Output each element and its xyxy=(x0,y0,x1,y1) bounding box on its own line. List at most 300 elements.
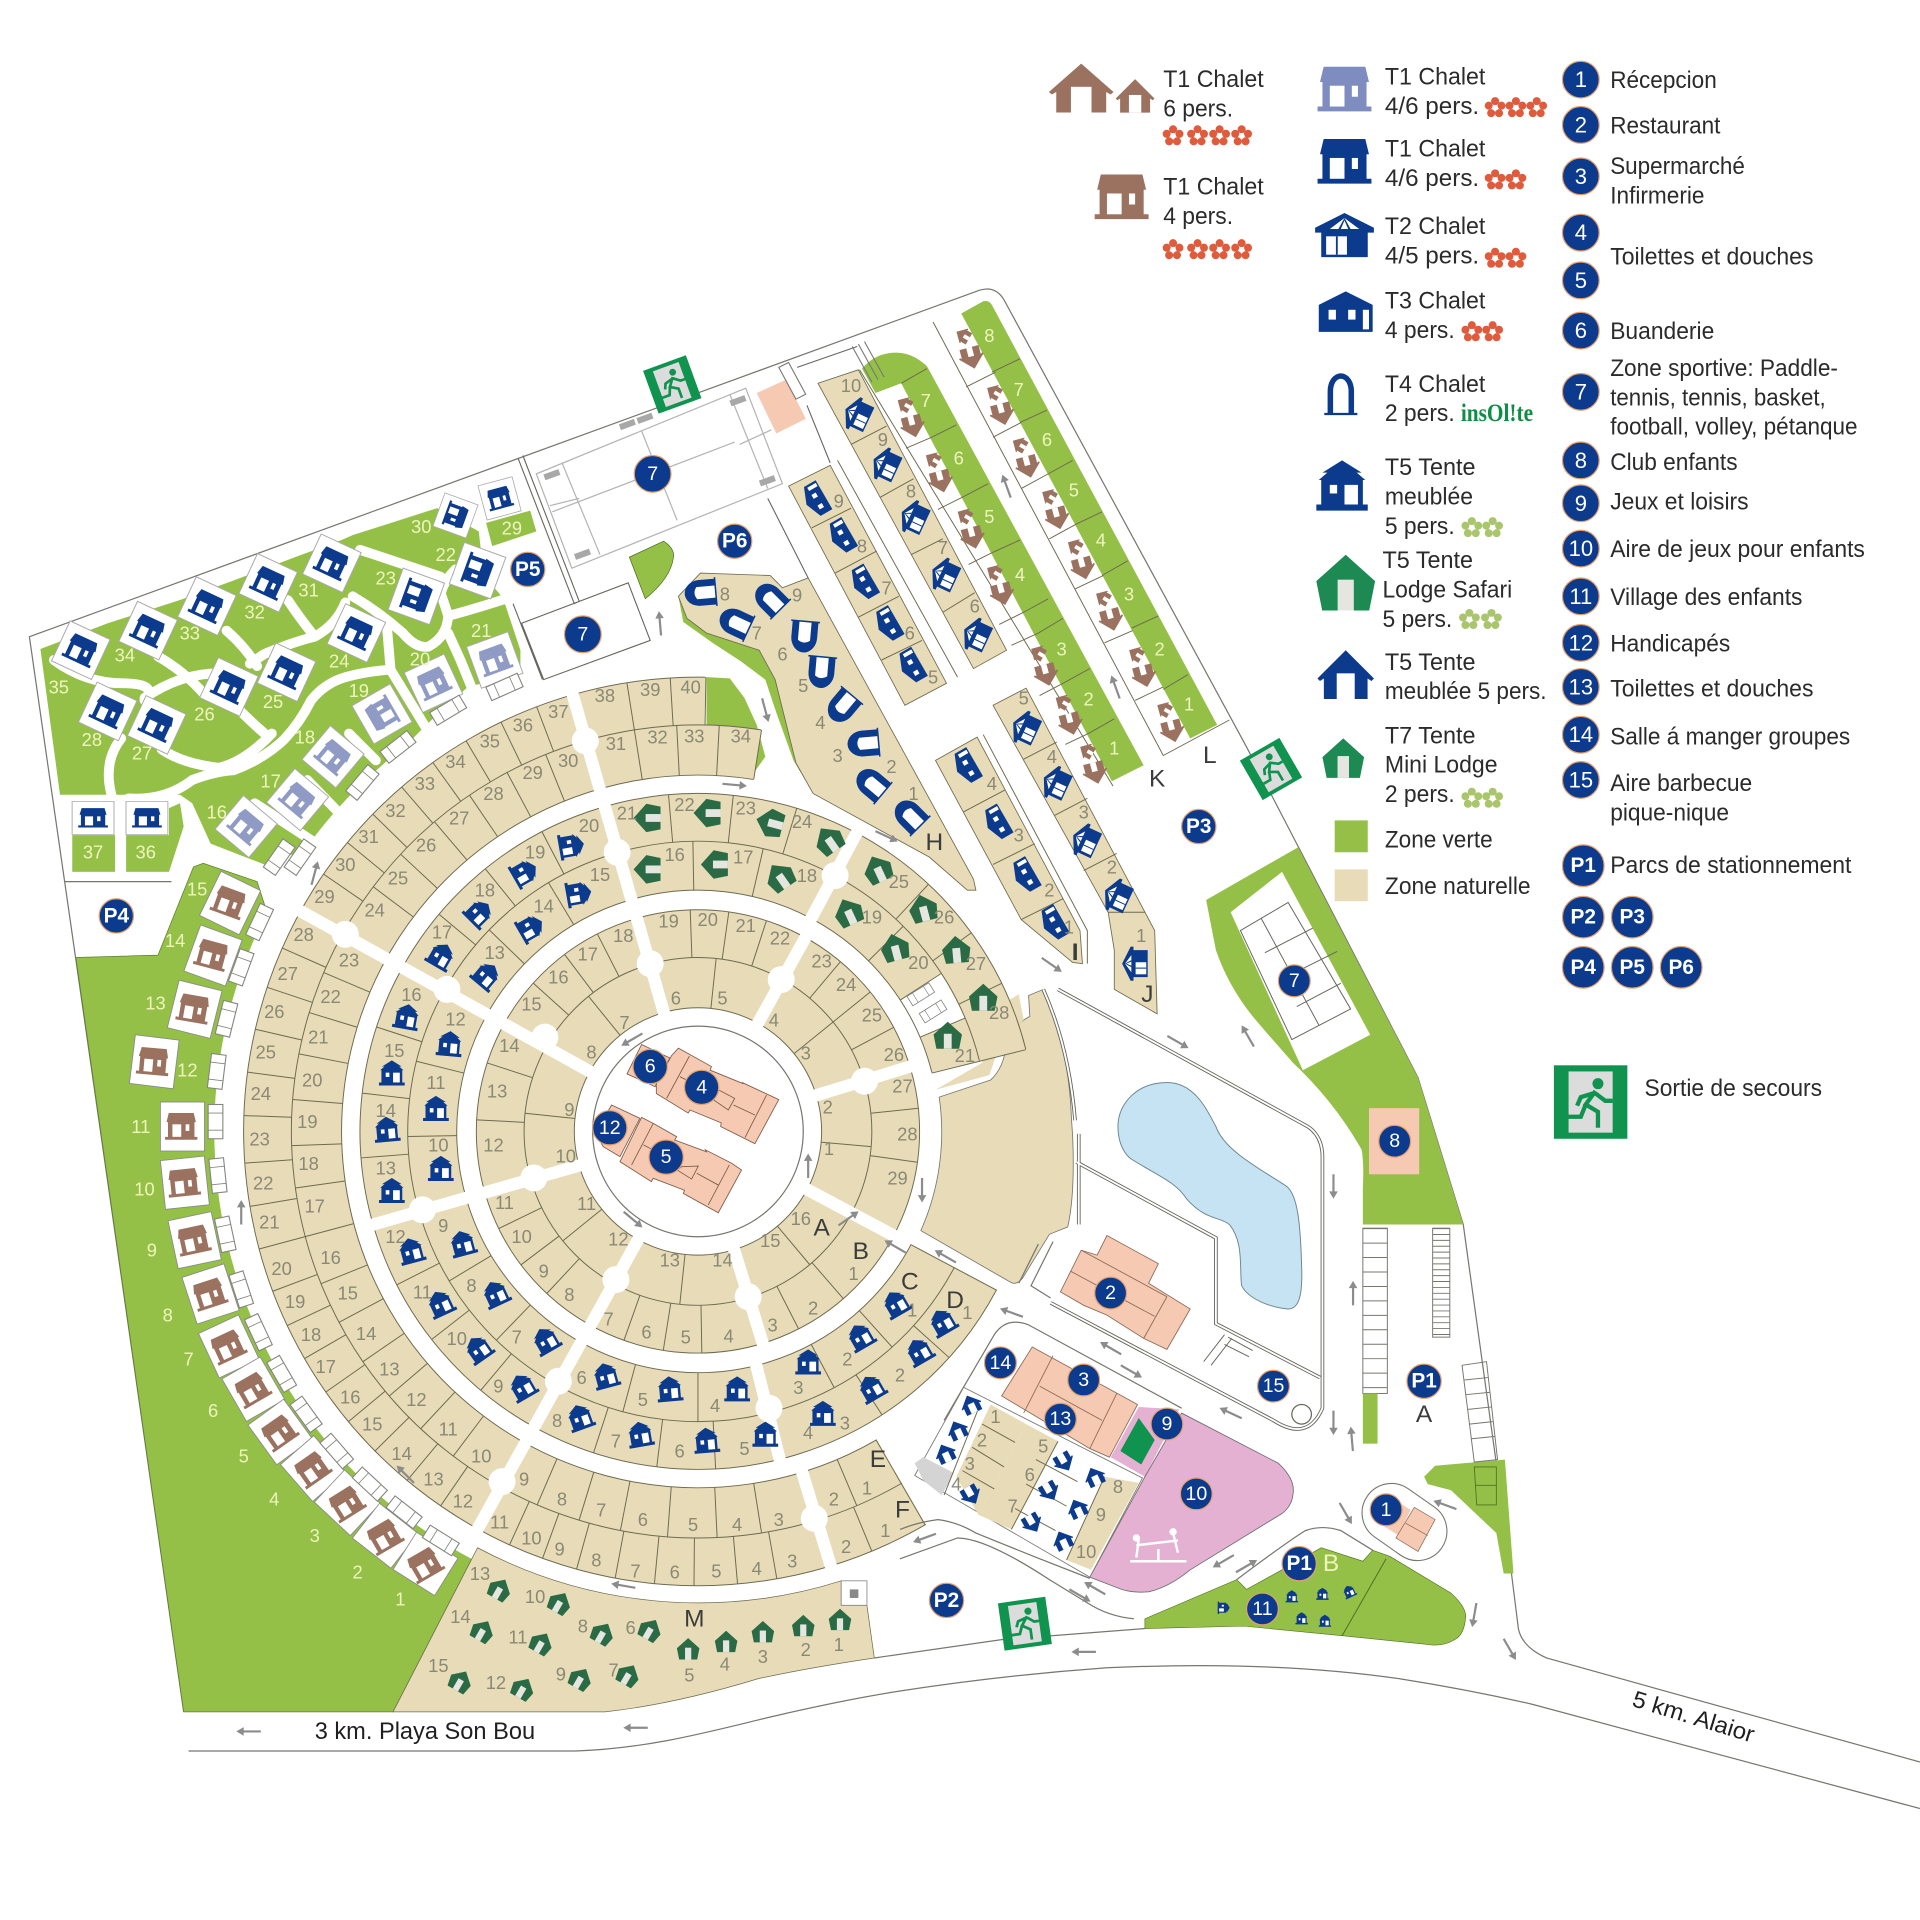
pitch numbers: 26 xyxy=(884,1044,904,1065)
legend column 2: chalet and tent types: T1 Chalet xyxy=(1385,136,1485,163)
legend column 3: numbered facilities: Handicapés xyxy=(1610,630,1730,657)
zone M: safari lodges: 9 xyxy=(556,1663,566,1684)
pitch numbers: 19 xyxy=(658,910,679,931)
pitch numbers: 5 xyxy=(711,1561,721,1582)
legend column 3: numbered facilities: Restaurant xyxy=(1610,112,1721,139)
zone J strip: 4 xyxy=(1047,746,1057,767)
legend badges: P1 xyxy=(1571,854,1596,877)
north-west lots 16 to 37: 24 xyxy=(329,651,349,672)
pitch numbers: 29 xyxy=(314,886,335,907)
zone I strip: 1 xyxy=(1064,916,1074,937)
pitch numbers: 33 xyxy=(684,725,704,746)
legend column 3: numbered facilities: Aire de jeux pour enfants xyxy=(1610,536,1865,563)
legend column 1: brown chalets xyxy=(1049,64,1264,259)
legend column 1: brown chalets: T1 Chalet xyxy=(1163,174,1264,201)
north-west lots 16 to 37: 26 xyxy=(194,703,215,724)
legend column 2: chalet and tent types: T5 Tente xyxy=(1385,454,1476,481)
pitch numbers: 4 xyxy=(769,1009,779,1030)
legend column 3: numbered facilities: Village des enfants xyxy=(1610,584,1802,611)
pitch numbers: 37 xyxy=(548,701,569,722)
pitch numbers: 20 xyxy=(579,815,599,836)
map number badges: 14 xyxy=(990,1352,1011,1374)
legend badges: 11 xyxy=(1569,584,1592,609)
pitch numbers: 17 xyxy=(432,921,452,942)
pitch numbers: 21 xyxy=(259,1212,280,1233)
car park P1 ladders xyxy=(1363,1228,1498,1462)
pitch numbers: 19 xyxy=(525,842,545,863)
strip of T2 chalets 6 to 10: 10 xyxy=(841,375,861,396)
legend column 3: numbered facilities: Toilettes et douches xyxy=(1610,243,1813,270)
pitch numbers: 26 xyxy=(264,1001,284,1022)
pitch numbers: 22 xyxy=(674,794,695,815)
legend column 2: chalet and tent types: 5 pers. xyxy=(1382,606,1452,633)
west lots 1 to 15 with brown chalets: 13 xyxy=(145,992,166,1013)
pitch numbers: 9 xyxy=(554,1538,565,1559)
pitch numbers: 10 xyxy=(471,1445,491,1466)
pitch numbers: 7 xyxy=(630,1561,641,1582)
road labels xyxy=(315,1686,1758,1747)
legend column 2: chalet and tent types: 2 pers. xyxy=(1385,781,1455,808)
pitch numbers: 10 xyxy=(521,1527,542,1548)
pitch numbers: 16 xyxy=(548,967,569,988)
pitch numbers: 5 xyxy=(681,1327,691,1348)
legend column 3: numbered facilities: Toilettes et douches xyxy=(1610,676,1813,703)
central plaza xyxy=(593,1026,803,1237)
west lots 1 to 15 with brown chalets: 6 xyxy=(208,1400,218,1421)
legend column 3: numbered facilities: Zone sportive: Paddle- xyxy=(1610,355,1838,382)
zone letters: E xyxy=(870,1446,886,1473)
pitch numbers: 12 xyxy=(445,1008,466,1029)
bungalow block 1 to 10: 3 xyxy=(965,1453,975,1474)
pitch numbers: 1 xyxy=(907,1300,917,1321)
bungalow block 1 to 10: 9 xyxy=(1096,1504,1106,1525)
pitch numbers: 16 xyxy=(320,1247,341,1268)
pitch numbers: 21 xyxy=(617,803,637,824)
legend badges: 10 xyxy=(1569,536,1593,561)
pitch numbers: 21 xyxy=(955,1045,975,1066)
pitch numbers: 16 xyxy=(340,1387,360,1408)
map number badges: 8 xyxy=(1389,1130,1400,1152)
pitch numbers: 2 xyxy=(842,1349,852,1370)
pitch numbers: 14 xyxy=(533,896,554,917)
legend column 2: chalet and tent types: Zone naturelle xyxy=(1385,873,1531,900)
pitch numbers: 27 xyxy=(449,807,469,828)
pitch numbers: 3 xyxy=(840,1412,850,1433)
legend column 3: numbered facilities: Infirmerie xyxy=(1610,182,1704,209)
pitch numbers: 28 xyxy=(897,1123,918,1144)
pitch numbers: 8 xyxy=(564,1284,574,1305)
pitch numbers: 11 xyxy=(426,1072,445,1093)
north-west lots 16 to 37: 20 xyxy=(410,648,430,669)
pitch dividers xyxy=(244,677,1026,1586)
map number badges: P1 xyxy=(1286,1552,1312,1575)
pitch numbers: 8 xyxy=(466,1275,477,1296)
radial access roads and junctions xyxy=(298,692,912,1568)
legend column 2: chalet and tent types: 4/5 pers. xyxy=(1385,242,1479,269)
map number badges: P1 xyxy=(1411,1370,1437,1393)
pitch numbers: 25 xyxy=(388,867,408,888)
legend badges: 4 xyxy=(1575,220,1587,245)
legend column 3: numbered facilities: Aire barbecue xyxy=(1610,770,1752,797)
pitch numbers: 14 xyxy=(712,1249,733,1270)
pitch numbers: 30 xyxy=(558,750,578,771)
pitch numbers: 14 xyxy=(499,1035,520,1056)
pitch numbers: 2 xyxy=(808,1297,818,1318)
pitch numbers: 4 xyxy=(723,1325,734,1346)
map number badges: 6 xyxy=(645,1056,656,1078)
bungalow block 1 to 10: 8 xyxy=(1113,1476,1123,1497)
zone K strip with green band: 6 xyxy=(954,447,964,468)
pitch numbers: 7 xyxy=(619,1012,630,1033)
zone H with T4 arches: 9 xyxy=(792,585,802,606)
legend column 2: chalet and tent types: T1 Chalet xyxy=(1385,63,1485,90)
west lots 1 to 15 with brown chalets: 9 xyxy=(147,1240,157,1261)
pitch numbers: 24 xyxy=(364,899,385,920)
legend badges: 15 xyxy=(1569,768,1593,792)
pitch numbers: 40 xyxy=(680,676,701,697)
legend column 2: chalet and tent types: Lodge Safari xyxy=(1382,577,1512,604)
pitch numbers: 17 xyxy=(316,1356,336,1377)
pitch numbers: 13 xyxy=(423,1469,444,1490)
map number badges: 7 xyxy=(577,623,588,645)
map number badges: P5 xyxy=(515,558,540,581)
legend badges: P4 xyxy=(1571,956,1596,979)
strip of T3 chalets 5 to 9: 5 xyxy=(928,667,938,688)
zone letters: I xyxy=(1072,939,1079,966)
pitch numbers: 13 xyxy=(376,1158,396,1179)
pitch numbers: 26 xyxy=(416,834,436,855)
strip of T3 chalets 5 to 9 xyxy=(789,460,958,705)
legend column 2: chalet and tent types: Zone verte xyxy=(1385,826,1493,853)
north-west lots 16 to 37: 35 xyxy=(49,676,69,697)
legend badges: 5 xyxy=(1575,268,1587,293)
legend column 2: chalet and tent types: T5 Tente xyxy=(1382,547,1473,574)
zone letters: L xyxy=(1203,742,1217,769)
zone M: safari lodges: 15 xyxy=(428,1655,449,1676)
map number badges: 4 xyxy=(696,1076,707,1098)
pitch numbers: 12 xyxy=(453,1491,473,1512)
legend column 2: chalet and tent types: T7 Tente xyxy=(1385,722,1476,749)
west lots 1 to 15 with brown chalets: 15 xyxy=(187,878,207,899)
legend column 2: chalet and tent types xyxy=(1315,63,1547,901)
map number badges: P2 xyxy=(934,1589,959,1612)
pitch numbers: 9 xyxy=(519,1469,529,1490)
east green with tennis court xyxy=(1206,847,1463,1224)
zone M: safari lodges: 14 xyxy=(450,1606,471,1627)
pitch numbers: 11 xyxy=(495,1192,514,1213)
pitch numbers: 2 xyxy=(823,1096,833,1117)
zone H with T4 arches: 4 xyxy=(815,712,826,733)
pitch numbers: 3 xyxy=(801,1043,811,1064)
pitch numbers: 39 xyxy=(640,679,660,700)
pitch numbers: 10 xyxy=(556,1145,576,1166)
zone letters xyxy=(684,742,1433,1632)
pitch numbers: 4 xyxy=(752,1558,762,1579)
pitch numbers: 1 xyxy=(880,1520,890,1541)
pitch numbers: 23 xyxy=(249,1128,270,1149)
west lots 1 to 15 with brown chalets: 14 xyxy=(165,930,185,951)
zone K strip with green band: 2 xyxy=(1083,689,1094,710)
pitch numbers: 12 xyxy=(406,1389,427,1410)
pitch numbers: 7 xyxy=(512,1327,522,1348)
zone M: safari lodges: 13 xyxy=(470,1563,490,1584)
pitch numbers: 28 xyxy=(483,783,504,804)
ring 2 blue tents west and south xyxy=(373,831,960,1454)
zone H with T4 arches: 7 xyxy=(752,623,762,644)
ring road xyxy=(214,648,1182,1615)
zone I strip: 2 xyxy=(1044,880,1054,901)
pitch numbers: 8 xyxy=(586,1041,597,1062)
pitch numbers: 26 xyxy=(934,907,954,928)
map number badges: 13 xyxy=(1050,1408,1071,1430)
zone K strip with green band: 3 xyxy=(1057,638,1067,659)
legend column 2: chalet and tent types: insOl!te xyxy=(1461,398,1533,427)
pitch numbers: 16 xyxy=(791,1208,811,1229)
pitch numbers: 23 xyxy=(736,798,756,819)
legend column 2: chalet and tent types: 5 pers. xyxy=(1385,513,1455,540)
pitch numbers: 32 xyxy=(385,800,406,821)
zone K strip with green band: 1 xyxy=(1109,738,1119,759)
pitch numbers: 22 xyxy=(253,1172,273,1193)
pitch numbers: 6 xyxy=(670,1562,680,1583)
zone M: safari lodges: 11 xyxy=(508,1627,527,1648)
west lots 1 to 15 with brown chalets: 7 xyxy=(183,1349,194,1370)
zone L strip with green band xyxy=(933,301,1229,756)
pitch numbers: 19 xyxy=(862,907,882,928)
north-west lots 16 to 37: 25 xyxy=(263,691,283,712)
west lots 1 to 15 with brown chalets: 10 xyxy=(134,1178,155,1199)
pitch numbers: 10 xyxy=(447,1328,467,1349)
pitch numbers: 15 xyxy=(362,1414,382,1435)
map number badges: 3 xyxy=(1078,1369,1089,1391)
legend column 3: numbered facilities: Récepcion xyxy=(1610,67,1717,94)
pitch numbers: 4 xyxy=(710,1395,720,1416)
west lots 1 to 15 with brown chalets: 1 xyxy=(395,1589,406,1610)
zone L strip with green band: 6 xyxy=(1042,429,1052,450)
zone L strip with green band: 3 xyxy=(1124,583,1134,604)
playground zone 10 xyxy=(1090,1413,1293,1592)
zone L strip with green band: 8 xyxy=(984,325,994,346)
pitch numbers: 10 xyxy=(511,1226,532,1247)
pitch numbers: 28 xyxy=(989,1002,1009,1023)
pitch numbers: 12 xyxy=(483,1134,504,1155)
zone L strip with green band: 1 xyxy=(1184,694,1194,715)
strip of T3 chalets 5 to 9: 8 xyxy=(857,536,867,557)
pitch numbers: 7 xyxy=(603,1308,614,1329)
bungalow block 1 to 10 xyxy=(915,1387,1142,1577)
road labels: 3 km. Playa Son Bou xyxy=(315,1718,535,1745)
pitch numbers: 23 xyxy=(811,951,832,972)
pitch numbers: 36 xyxy=(513,714,533,735)
north-west lots 16 to 37: 31 xyxy=(298,580,319,601)
west lots 1 to 15 with brown chalets: 12 xyxy=(177,1060,198,1081)
bungalow block 1 to 10: 2 xyxy=(977,1430,987,1451)
pitch numbers: 3 xyxy=(768,1314,778,1335)
pitch numbers: 15 xyxy=(760,1230,780,1251)
pitch numbers: 24 xyxy=(792,811,812,832)
legend column 1: brown chalets: 6 pers. xyxy=(1163,95,1233,122)
pitch numbers: 20 xyxy=(271,1258,292,1279)
strip of T2 chalets 6 to 10: 8 xyxy=(906,481,916,502)
pitch numbers: 16 xyxy=(401,984,422,1005)
legend column 2: chalet and tent types: meublée 5 pers. xyxy=(1385,678,1547,705)
zone J strip xyxy=(993,687,1157,1014)
zone L strip with green band: 2 xyxy=(1154,638,1165,659)
zone letters: M xyxy=(684,1605,704,1632)
legend: sortie de secours: Sortie de secours xyxy=(1644,1075,1822,1102)
reception and services block xyxy=(900,1322,1182,1619)
zone letters: B xyxy=(1323,1550,1339,1577)
north-west lots 16 to 37: 34 xyxy=(115,645,135,666)
pitch numbers: 17 xyxy=(304,1196,325,1217)
north-west lots 16 to 37: 37 xyxy=(83,842,103,863)
pitch numbers: 18 xyxy=(797,865,817,886)
legend column 3: numbered facilities: Parcs de stationnement xyxy=(1610,852,1852,879)
concentric pitches xyxy=(77,511,1319,1752)
bungalow block 1 to 10: 7 xyxy=(1008,1496,1018,1517)
strip of T2 chalets 6 to 10: 6 xyxy=(970,596,980,617)
pitch numbers: 32 xyxy=(647,727,668,748)
north-west lots 16 to 37: 33 xyxy=(180,623,200,644)
pitch numbers: 31 xyxy=(606,733,626,754)
legend badges: 13 xyxy=(1569,674,1593,699)
zone H with T4 arches xyxy=(678,573,976,890)
site boundary and roads xyxy=(29,289,1920,1809)
pitch numbers: 25 xyxy=(256,1041,276,1062)
pitch numbers: 9 xyxy=(493,1376,503,1397)
zone letters: A xyxy=(813,1215,830,1242)
pitch numbers: 5 xyxy=(739,1438,750,1459)
zone M: safari lodges: 10 xyxy=(525,1586,545,1607)
emergency exit signs on map xyxy=(643,355,1302,1651)
parked cars in ring 2 xyxy=(907,983,947,1023)
zone letters: C xyxy=(901,1269,919,1296)
pitch numbers: 3 xyxy=(774,1509,784,1530)
legend column 3: numbered facilities xyxy=(1610,67,1865,879)
north-west lots 16 to 37: 23 xyxy=(376,567,396,588)
pitch numbers: 1 xyxy=(848,1263,859,1284)
bungalow block 1 to 10: 6 xyxy=(1025,1464,1035,1485)
legend badges: 14 xyxy=(1569,722,1593,747)
pitch numbers: 9 xyxy=(564,1099,574,1120)
legend column 2: chalet and tent types: T4 Chalet xyxy=(1385,371,1485,398)
zone letters: F xyxy=(895,1496,910,1523)
zone M: safari lodges: 7 xyxy=(608,1660,619,1681)
pitch numbers: 6 xyxy=(671,987,681,1008)
pitch numbers: 11 xyxy=(439,1418,458,1439)
pitch numbers: 31 xyxy=(358,826,379,847)
zone M: safari lodges: 1 xyxy=(834,1634,844,1655)
zone H with T4 arches: 8 xyxy=(720,583,730,604)
zone M: safari lodges: 4 xyxy=(720,1654,730,1675)
pitch numbers: 38 xyxy=(595,685,615,706)
zone L strip with green band: 5 xyxy=(1069,479,1079,500)
pitch numbers: 34 xyxy=(445,751,466,772)
pitch numbers: 11 xyxy=(490,1512,509,1533)
pitch numbers: 27 xyxy=(892,1076,913,1097)
pitch numbers: 4 xyxy=(803,1422,813,1443)
pool enclosure double walls xyxy=(1043,989,1322,1429)
pitch numbers: 3 xyxy=(793,1377,803,1398)
pitch numbers: 2 xyxy=(841,1536,851,1557)
north-west lots 16 to 37: 27 xyxy=(132,743,152,764)
zone letters: D xyxy=(946,1287,964,1314)
zone M: safari lodges: 6 xyxy=(626,1617,636,1638)
legend column 3: numbered facilities: Club enfants xyxy=(1610,449,1738,476)
zone M: safari lodges: 5 xyxy=(684,1665,694,1686)
pitch numbers: 20 xyxy=(908,952,929,973)
zone M: safari lodges: 2 xyxy=(801,1639,811,1660)
lake xyxy=(1118,1082,1302,1309)
zone H with T4 arches: 2 xyxy=(886,756,897,777)
legend column 2: chalet and tent types: meublée xyxy=(1385,483,1473,510)
north-east entrance garden xyxy=(1424,1460,1513,1573)
legend column 2: chalet and tent types: Mini Lodge xyxy=(1385,752,1498,779)
pitch numbers: 4 xyxy=(732,1514,742,1535)
pitch numbers: 15 xyxy=(384,1040,404,1061)
zone H with T4 arches: 5 xyxy=(798,675,808,696)
west lots 1 to 15 with brown chalets: 5 xyxy=(239,1445,249,1466)
north-west lots 16 to 37: 17 xyxy=(260,771,281,792)
north-west lots 16 to 37: 29 xyxy=(502,517,522,538)
map number badges: 2 xyxy=(1105,1282,1116,1304)
zone letters: A xyxy=(1416,1401,1433,1428)
west lots 1 to 15 with brown chalets: 3 xyxy=(310,1525,320,1546)
zone M: safari lodges: 12 xyxy=(486,1672,506,1693)
legend column 3: numbered facilities: football, volley, pétanque xyxy=(1610,414,1858,441)
pitch numbers: 19 xyxy=(285,1291,305,1312)
pitch numbers: 35 xyxy=(480,730,500,751)
pitch numbers: 13 xyxy=(487,1081,507,1102)
pitch numbers: 25 xyxy=(862,1005,882,1026)
zone I strip xyxy=(936,735,1087,964)
pitch numbers: 34 xyxy=(731,725,751,746)
strip of T2 chalets 6 to 10: 7 xyxy=(938,537,948,558)
pitch numbers: 27 xyxy=(278,963,298,984)
north-west lots 16 to 37 xyxy=(49,477,523,875)
map number badges: 9 xyxy=(1161,1413,1172,1435)
legend column 2: chalet and tent types: T2 Chalet xyxy=(1385,213,1485,240)
pitch numbers: 9 xyxy=(539,1261,549,1282)
zone letters: H xyxy=(925,829,943,856)
north-west lots 16 to 37: 16 xyxy=(207,801,227,822)
pitch numbers: 22 xyxy=(320,986,341,1007)
pitch numbers: 12 xyxy=(608,1229,629,1250)
strip of T3 chalets 5 to 9: 7 xyxy=(881,577,892,598)
legend column 3: numbered facilities: Jeux et loisirs xyxy=(1610,488,1749,515)
pitch numbers: 5 xyxy=(638,1389,648,1410)
zone M: safari lodges: 3 xyxy=(758,1646,768,1667)
north-west lots 16 to 37: 36 xyxy=(136,842,156,863)
map number badges: 10 xyxy=(1185,1483,1207,1505)
legend column 2: chalet and tent types: T5 Tente xyxy=(1385,649,1476,676)
pitch numbers: 14 xyxy=(376,1100,396,1121)
pitch numbers: 5 xyxy=(717,987,728,1008)
legend badges: 3 xyxy=(1575,164,1587,189)
legend badges: 9 xyxy=(1575,491,1587,516)
legend badges: 7 xyxy=(1575,379,1587,404)
map number badges: 15 xyxy=(1263,1375,1284,1397)
zone I strip: 3 xyxy=(1014,825,1024,846)
zone J strip: 2 xyxy=(1107,856,1117,877)
bungalow block 1 to 10: 10 xyxy=(1076,1541,1096,1562)
zone letters: B xyxy=(853,1238,869,1265)
legend column 3: numbered facilities: pique-nique xyxy=(1610,799,1729,826)
map number badges: 11 xyxy=(1252,1598,1273,1620)
legend badges: P5 xyxy=(1620,956,1645,979)
pitch numbers: 18 xyxy=(298,1153,319,1174)
pitch numbers: 11 xyxy=(413,1281,432,1302)
